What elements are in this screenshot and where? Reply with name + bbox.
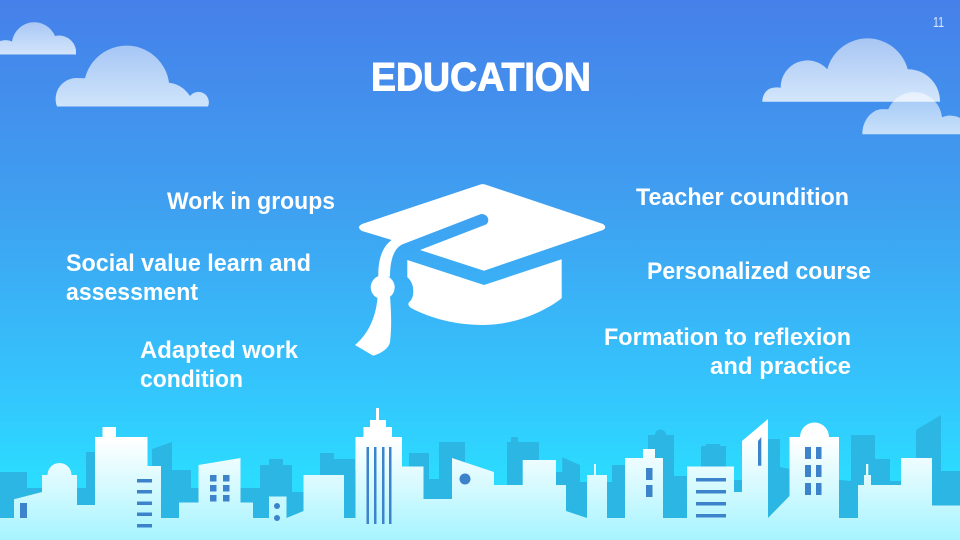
city skyline: front buildings (0, 408, 960, 540)
city skyline: back buildings (0, 415, 960, 530)
label: social value: Social value learn and (66, 250, 311, 277)
cloud: top left large (56, 46, 209, 106)
label: adapted work condition: Adapted work (140, 337, 299, 364)
label: work in groups: Work in groups (167, 188, 335, 215)
cloud: top left small (0, 22, 76, 55)
label: formation to reflexion: Formation to reflexion (604, 324, 851, 351)
page number: 11 (933, 14, 944, 31)
label: adapted work condition (140, 337, 299, 393)
label: adapted work condition: condition (140, 366, 243, 393)
label: formation to reflexion (604, 324, 851, 380)
cloud: top right large (762, 38, 940, 102)
title: EDUCATION (371, 56, 591, 100)
left text blocks (66, 188, 335, 393)
label: social value (66, 250, 311, 306)
label: teacher condition: Teacher coundition (636, 184, 849, 211)
icon: graduation cap (355, 184, 605, 356)
label: personalized course: Personalized course (647, 258, 871, 285)
right text blocks (604, 184, 871, 380)
label: social value: assessment (66, 279, 198, 306)
cloud: top right small (862, 92, 960, 134)
city skyline: windows and details (20, 437, 822, 528)
label: formation to reflexion: and practice (710, 353, 851, 380)
